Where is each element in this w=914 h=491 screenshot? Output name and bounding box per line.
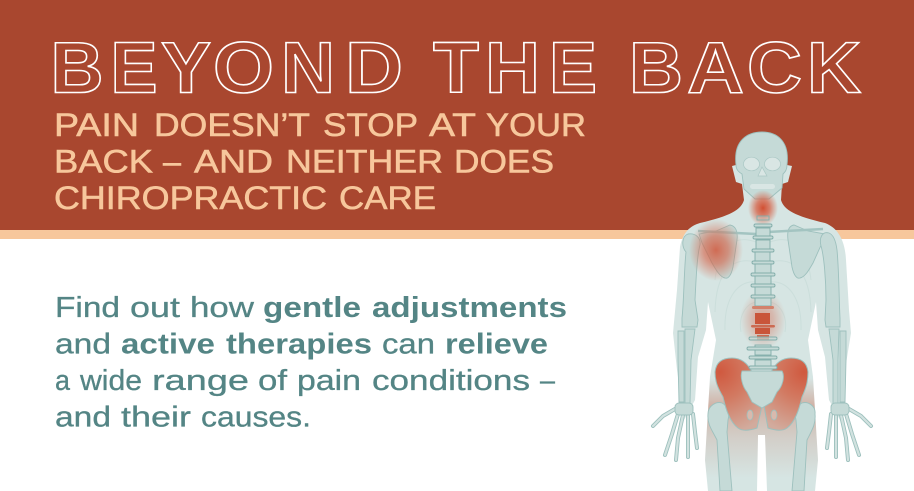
forearm bones: [678, 329, 846, 404]
title: outlined heading: E: [110, 28, 158, 108]
title: outlined heading: K: [807, 28, 861, 108]
title: outlined heading: O: [213, 28, 274, 108]
hand bones right: [827, 403, 871, 460]
title: outlined heading: B: [50, 28, 104, 108]
skull: [736, 132, 787, 199]
intro paragraph: active: [121, 328, 215, 360]
intro paragraph: gentle: [263, 292, 361, 324]
title: outlined heading: Y: [161, 28, 211, 108]
intro paragraph: and: [55, 328, 111, 360]
pain glow: shoulder: [689, 219, 743, 281]
intro paragraph: causes.: [201, 402, 311, 434]
body silhouette: [673, 132, 851, 491]
intro paragraph: their: [121, 402, 191, 434]
left scapula: [699, 225, 737, 278]
subheading: DOESN’T: [154, 107, 310, 143]
intro paragraph: relieve: [445, 328, 548, 360]
subheading: DOES: [454, 144, 554, 180]
intro paragraph: and: [55, 402, 111, 434]
title: outlined heading: H: [485, 28, 540, 108]
intro paragraph: conditions: [372, 365, 530, 397]
intro paragraph: out: [130, 292, 180, 324]
subheading: YOUR: [486, 107, 586, 143]
subheading: CARE: [339, 180, 436, 216]
peach divider band: [0, 230, 914, 239]
intro paragraph: can: [382, 328, 435, 360]
clavicles: [698, 229, 823, 234]
spine: [747, 216, 779, 369]
skeleton figure: [653, 132, 871, 491]
subheading: STOP: [323, 107, 418, 143]
right scapula: [788, 225, 825, 278]
title: outlined heading: B: [629, 28, 683, 108]
intro paragraph: wide: [79, 365, 142, 397]
subheading: AND: [194, 144, 273, 180]
subheading: AT: [429, 107, 476, 143]
intro paragraph: how: [190, 292, 255, 324]
intro paragraph: [55, 292, 567, 434]
intro paragraph: a: [55, 365, 71, 397]
sacrum: [741, 371, 783, 408]
subheading: [54, 107, 586, 216]
subheading: CHIROPRACTIC: [54, 180, 327, 216]
title: outlined heading: T: [433, 28, 479, 108]
intro paragraph: of: [258, 365, 288, 397]
subheading: NEITHER: [286, 144, 443, 180]
red header background: [0, 0, 914, 230]
pain glow: neck: [748, 190, 778, 226]
pain glow: lower back: [740, 290, 786, 350]
subheading: BACK: [54, 144, 153, 180]
humerus bones: [682, 233, 840, 327]
title: outlined heading: A: [687, 28, 744, 108]
intro paragraph: adjustments: [372, 292, 567, 324]
femurs: [708, 403, 815, 491]
intro paragraph: Find: [55, 292, 120, 324]
title: outlined heading: N: [281, 28, 335, 108]
hand bones left: [653, 403, 697, 460]
subheading: –: [163, 144, 181, 180]
intro paragraph: therapies: [226, 328, 372, 360]
intro paragraph: –: [540, 365, 556, 397]
title: outlined heading: E: [549, 28, 597, 108]
title: outlined heading: [50, 28, 861, 108]
intro paragraph: pain: [297, 365, 361, 397]
ribs: [715, 240, 811, 332]
pelvis: [715, 358, 808, 430]
subheading: PAIN: [54, 107, 139, 143]
title: outlined heading: C: [747, 28, 802, 108]
title: outlined heading: D: [345, 28, 403, 108]
intro paragraph: range: [152, 365, 249, 397]
thigh pain glow: [705, 382, 818, 466]
